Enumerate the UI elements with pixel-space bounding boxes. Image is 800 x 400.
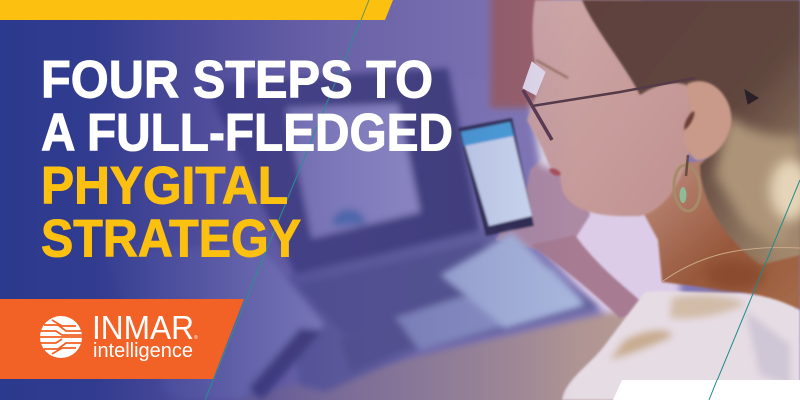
teal diagonal line left [205,0,369,400]
title: STRATEGY [41,210,301,268]
face [527,0,690,216]
title: PHYGITAL [41,156,288,216]
orange logo panel [0,299,244,379]
laptop [205,68,600,392]
yellow top banner [0,0,393,20]
necklace [663,247,800,281]
title: FOUR STEPS TO [41,50,433,110]
tablet [100,248,325,400]
tan hair strands [715,115,800,250]
lips [548,167,562,177]
inner ear shadow [684,111,694,130]
title [41,50,453,268]
glasses [523,62,758,140]
woman in profile [523,0,800,400]
logo wordmark: INMAR [92,309,194,346]
shirt [562,291,800,400]
teal line across banner [361,0,369,20]
teal line over white corner [709,380,717,400]
teal diagonal line right [709,180,800,400]
ear [685,81,731,160]
neck [620,150,800,310]
logo subline: intelligence [93,340,193,362]
hair [582,0,800,265]
icon: inmar globe [40,316,82,358]
title: A FULL-FLEDGED [41,104,453,162]
phone and hand [458,100,650,318]
dark neck shadow [705,259,765,291]
earring [672,155,702,212]
registered mark: ® [194,334,198,341]
bright neck light [770,160,800,220]
eyebrow [536,60,568,78]
white corner shape [613,380,800,400]
